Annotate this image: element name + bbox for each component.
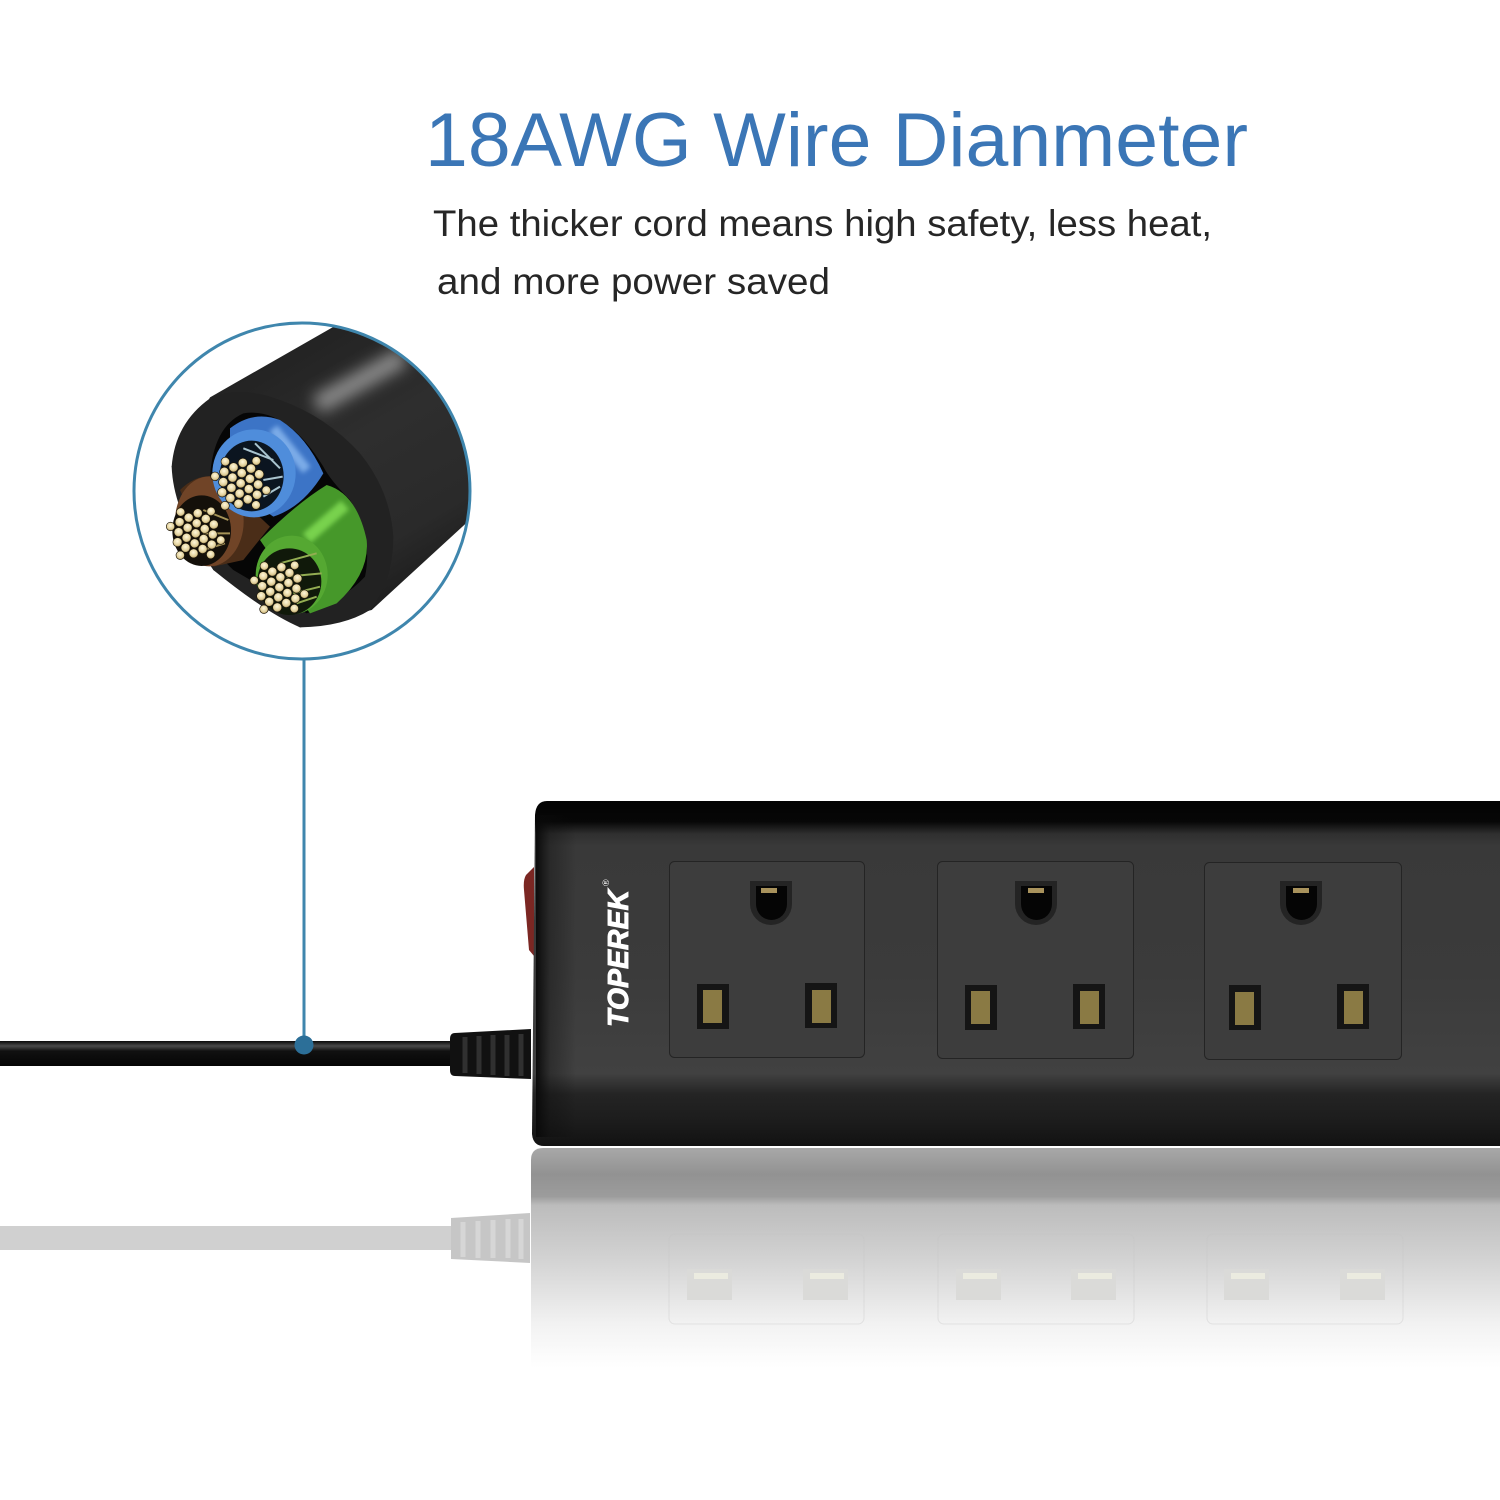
cable sheath (172, 325, 480, 627)
cable end face (172, 392, 393, 627)
brown wire (154, 476, 270, 575)
power strip body (532, 801, 1500, 1146)
socket 1: right slot (805, 983, 837, 1028)
brand logo: ® (601, 879, 611, 886)
socket 3: left slot (1229, 985, 1261, 1030)
description text: and more power saved (437, 261, 830, 302)
connector line (302, 660, 306, 1045)
cable inner cavity (205, 413, 367, 613)
reflection: body (531, 1148, 1500, 1368)
reflection: socket 3 (1207, 1234, 1403, 1324)
reflection: socket 2 (938, 1234, 1134, 1324)
blue wire (198, 416, 323, 526)
reflection: socket 1 (669, 1234, 864, 1324)
description text (433, 203, 1212, 302)
brand logo: TOPEREK (603, 888, 635, 1027)
socket 3: right slot (1337, 984, 1369, 1029)
strain relief (450, 1029, 531, 1079)
socket 3: ground hole (1280, 881, 1322, 925)
socket 2: right slot (1073, 984, 1105, 1029)
socket 3 (1204, 862, 1402, 1060)
socket 1: ground hole (750, 881, 792, 925)
green wire strands (238, 545, 321, 629)
reflection: strain relief (451, 1213, 530, 1263)
callout ring (134, 323, 470, 659)
socket 2 (938, 862, 1134, 1058)
socket 2: ground hole (1015, 881, 1057, 925)
reflection: cord (0, 1226, 451, 1250)
green wire (238, 485, 367, 629)
blue wire strands (198, 441, 283, 526)
connector dot (294, 1036, 314, 1054)
socket 2: left slot (965, 985, 997, 1030)
magnified cable callout (134, 323, 480, 659)
red power switch (524, 867, 534, 956)
description text: The thicker cord means high safety, less heat, (433, 203, 1212, 244)
reflection of power strip (0, 1148, 1500, 1368)
title: 18AWG Wire Dianmeter (425, 98, 1248, 183)
socket 1 (670, 862, 864, 1058)
brown wire strands (154, 491, 237, 575)
socket 1: left slot (697, 984, 729, 1029)
power cord (0, 1041, 452, 1066)
